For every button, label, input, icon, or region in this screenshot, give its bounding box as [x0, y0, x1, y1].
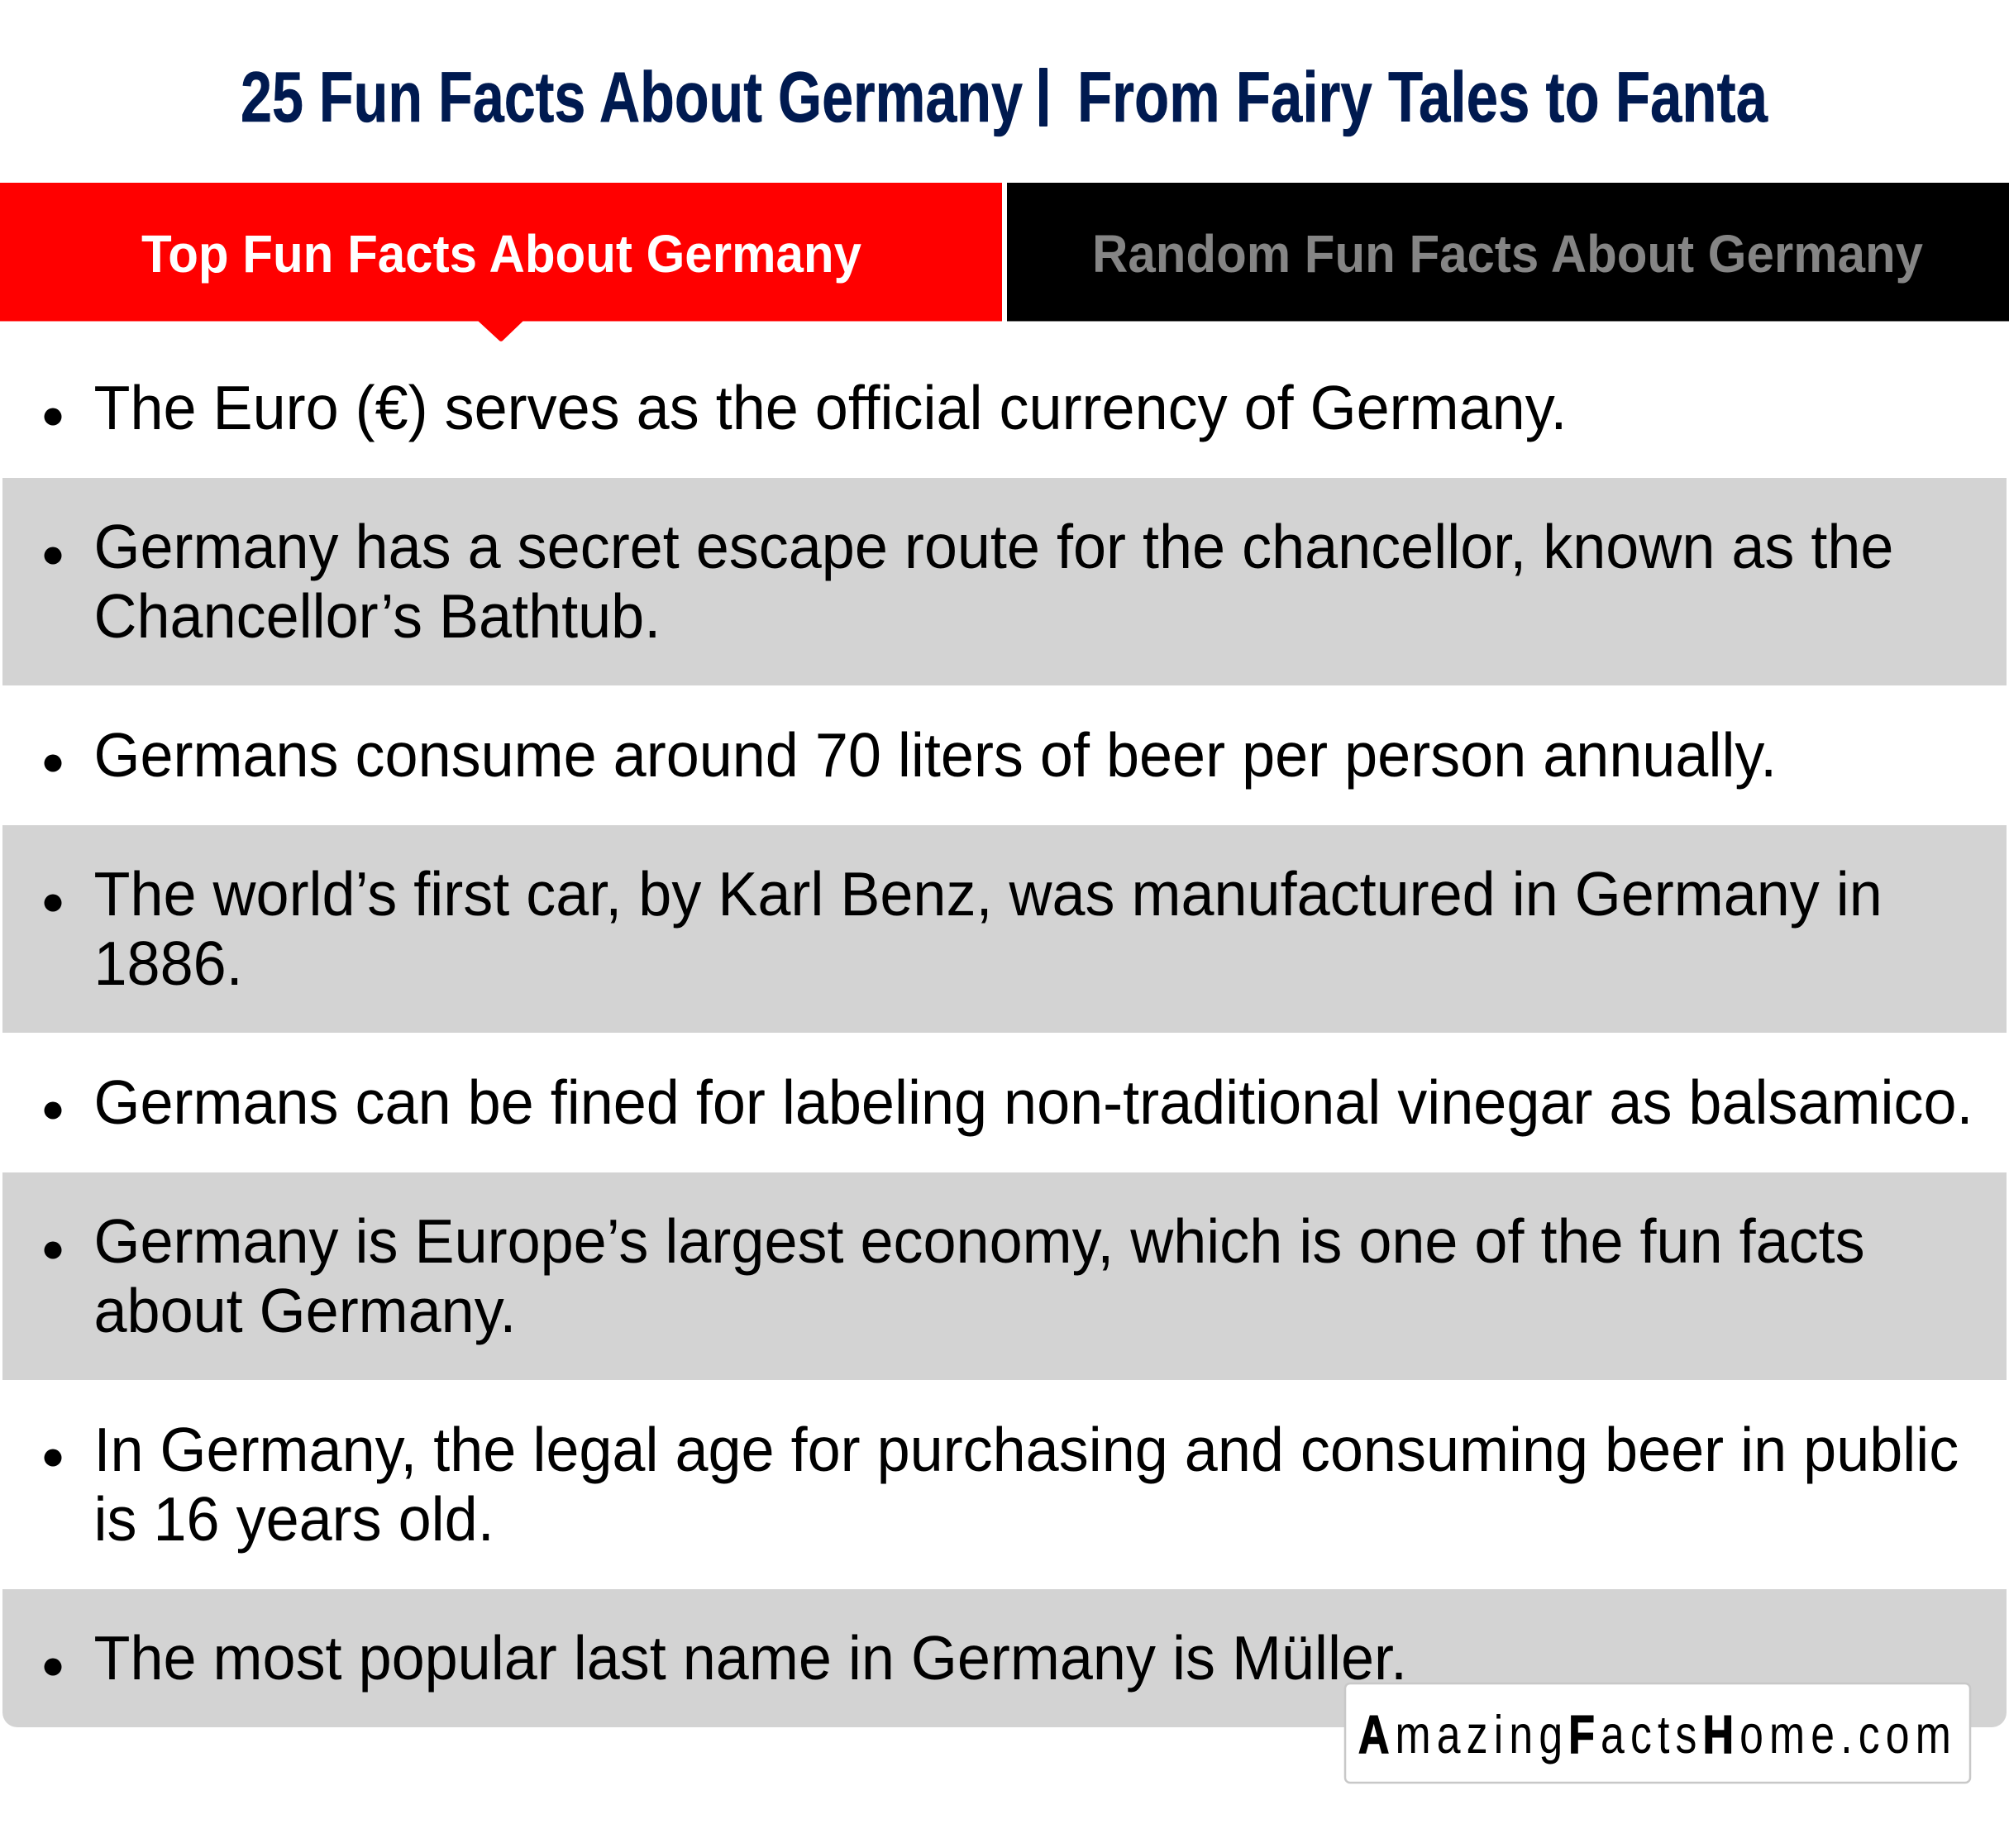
watermark badge — [1345, 1683, 1970, 1783]
active tab: top fun facts — [0, 183, 1002, 341]
fact 1: The Euro (€) serves as the official currency of Germany. — [94, 373, 1567, 442]
fact 7: is 16 years old. — [94, 1484, 494, 1554]
fact 2: Germany has a secret escape route for the chancellor, known as the — [94, 512, 1893, 581]
fact 7: In Germany, the legal age for purchasing and consuming beer in public — [94, 1415, 1959, 1484]
title: 25 Fun Facts About Germany — [241, 58, 1023, 137]
inactive tab: random fun facts — [1007, 183, 2009, 321]
fact 6: Germany is Europe’s largest economy, which is one of the fun facts — [94, 1206, 1865, 1276]
watermark badge: AmazingFactsHome.com — [1358, 1704, 1957, 1764]
fact 2: Chancellor’s Bathtub. — [94, 581, 661, 651]
fact 7 — [45, 1415, 1959, 1554]
fact 3: Germans consume around 70 liters of beer per person annually. — [94, 720, 1777, 790]
fact 2 — [2, 478, 2007, 685]
fact 5: Germans can be fined for labeling non-traditional vinegar as balsamico. — [94, 1067, 1973, 1137]
title — [241, 58, 1768, 137]
title: From Fairy Tales to Fanta — [1077, 58, 1768, 137]
fact 4 — [2, 825, 2007, 1033]
fact 6 — [2, 1172, 2007, 1380]
fact 4: The world’s first car, by Karl Benz, was manufactured in Germany in — [94, 859, 1883, 929]
active tab: top fun facts: Top Fun Facts About Germany — [141, 224, 861, 284]
fact 4: 1886. — [94, 929, 243, 998]
fact 8 — [2, 1589, 2007, 1727]
fact 6: about Germany. — [94, 1276, 516, 1345]
fact 8: The most popular last name in Germany is Müller. — [94, 1623, 1407, 1693]
inactive tab: random fun facts: Random Fun Facts About Germany — [1092, 224, 1923, 284]
